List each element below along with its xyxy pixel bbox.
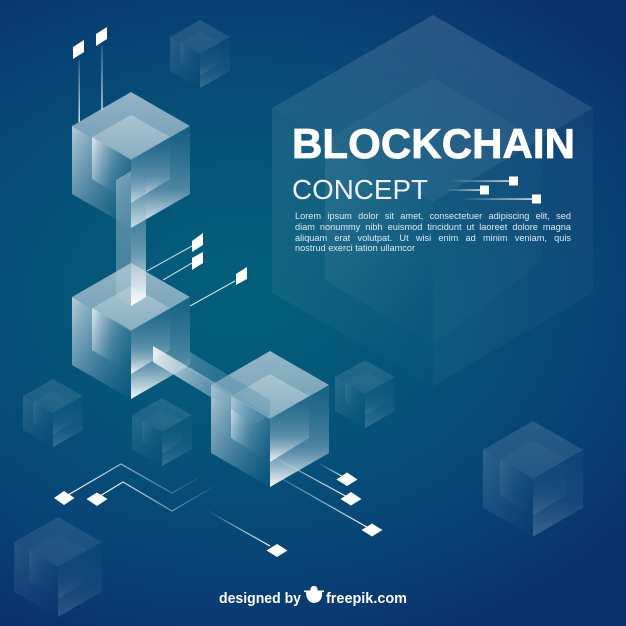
body text: aliquam erat volutpat. Ut wisi enim ad minim veniam, quis — [295, 233, 571, 243]
background cube lower right — [483, 421, 583, 537]
title circuit decoration — [445, 176, 541, 204]
small background cube right of chain — [335, 360, 395, 428]
small background cube left — [23, 379, 83, 447]
cube 3 — [211, 351, 329, 487]
body text: Lorem ipsum dolor sit amet, consectetuer adipiscing elit, sed — [295, 211, 571, 221]
diagonal connector pipe — [153, 346, 270, 424]
background cube lower left — [14, 517, 102, 617]
body text — [295, 211, 571, 253]
logo text left: designed by — [219, 591, 301, 607]
logo icon — [304, 586, 324, 603]
logo text right: freepik.com — [326, 591, 407, 607]
small background cube top — [170, 20, 230, 88]
vertical connector pipe — [116, 171, 146, 306]
title: BLOCKCHAIN — [292, 120, 575, 167]
circuit lines and nodes bottom left — [54, 464, 220, 511]
cube 2 — [72, 263, 190, 399]
subtitle: CONCEPT — [292, 174, 428, 205]
cube 1 — [72, 92, 190, 228]
large background hexagon cube — [272, 15, 593, 386]
body text: diam nonummy nibh euismod tincidunt ut laoreet dolore magna — [295, 222, 571, 232]
flags above first cube — [73, 27, 107, 122]
circuit lines and nodes bottom right — [270, 455, 382, 536]
body text: nostrud exerci tation ullamcor — [295, 243, 415, 253]
circuit line and node bottom centre — [208, 492, 288, 557]
flags beside second cube — [147, 233, 247, 306]
small background cube middle — [132, 398, 192, 466]
